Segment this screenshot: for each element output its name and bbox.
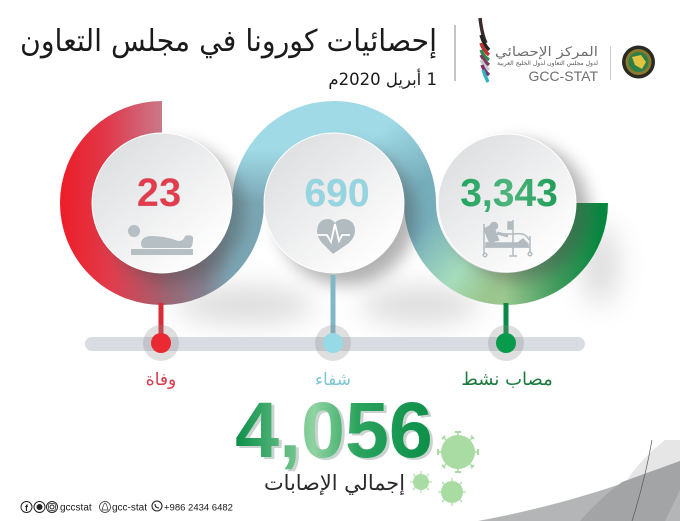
icon: twitter (34, 502, 45, 512)
timeline bar (85, 337, 585, 351)
label: active cases: مصاب نشط (461, 369, 553, 390)
handle: gcc-stat: gcc-stat (112, 502, 147, 514)
total number: 4,056 (238, 387, 436, 476)
icon: medium virus (438, 478, 466, 506)
icon: hospital bed (483, 220, 532, 257)
handle: gccstat: gccstat (60, 502, 92, 514)
date: 1 أبريل 2020م (328, 68, 437, 90)
panel: deaths (92, 133, 232, 273)
phone number: +986 2434 6482 (164, 502, 233, 514)
logo divider (610, 46, 611, 80)
active number: 3,343 (460, 172, 558, 215)
icon: snapchat (100, 502, 110, 512)
icon: whatsapp (152, 501, 162, 511)
background swoosh bottom right (478, 440, 680, 521)
icon: person lying down (128, 225, 193, 255)
icon: small virus (410, 471, 432, 493)
circle shadows (104, 141, 589, 285)
label: deaths: وفاة (146, 370, 176, 390)
icon: GCC emblem (622, 46, 655, 78)
deaths number: 23 (137, 171, 181, 215)
ribbon (76, 117, 592, 289)
icon: large virus (438, 432, 478, 472)
title: إحصائيات كورونا في مجلس التعاون (20, 24, 437, 59)
panel: active cases (438, 134, 576, 272)
footer: social contacts (21, 501, 233, 514)
timeline pin: recovered (315, 275, 351, 361)
GCC-STAT logo (480, 18, 598, 84)
total label: إجمالي الإصابات (264, 471, 405, 496)
logo ribbon mark (480, 18, 489, 82)
divider (454, 25, 456, 81)
icon: instagram (46, 502, 58, 512)
icon: heart with pulse (317, 219, 355, 254)
timeline pin: deaths (143, 303, 179, 361)
logo arabic name: المركز الإحصائي (495, 45, 598, 60)
total number: 4,056 (235, 385, 433, 474)
logo arabic subtitle: لدول مجلس التعاون لدول الخليج العربية (497, 60, 598, 67)
timeline pin: active (488, 303, 524, 361)
ground shadows (175, 225, 618, 323)
icon: facebook: f (25, 503, 29, 513)
logo latin name: GCC-STAT (529, 68, 598, 84)
label: recovered: شفاء (315, 370, 351, 390)
icon: facebook (21, 502, 32, 513)
panel: recovered (264, 133, 404, 273)
recovered number: 690 (304, 172, 370, 215)
